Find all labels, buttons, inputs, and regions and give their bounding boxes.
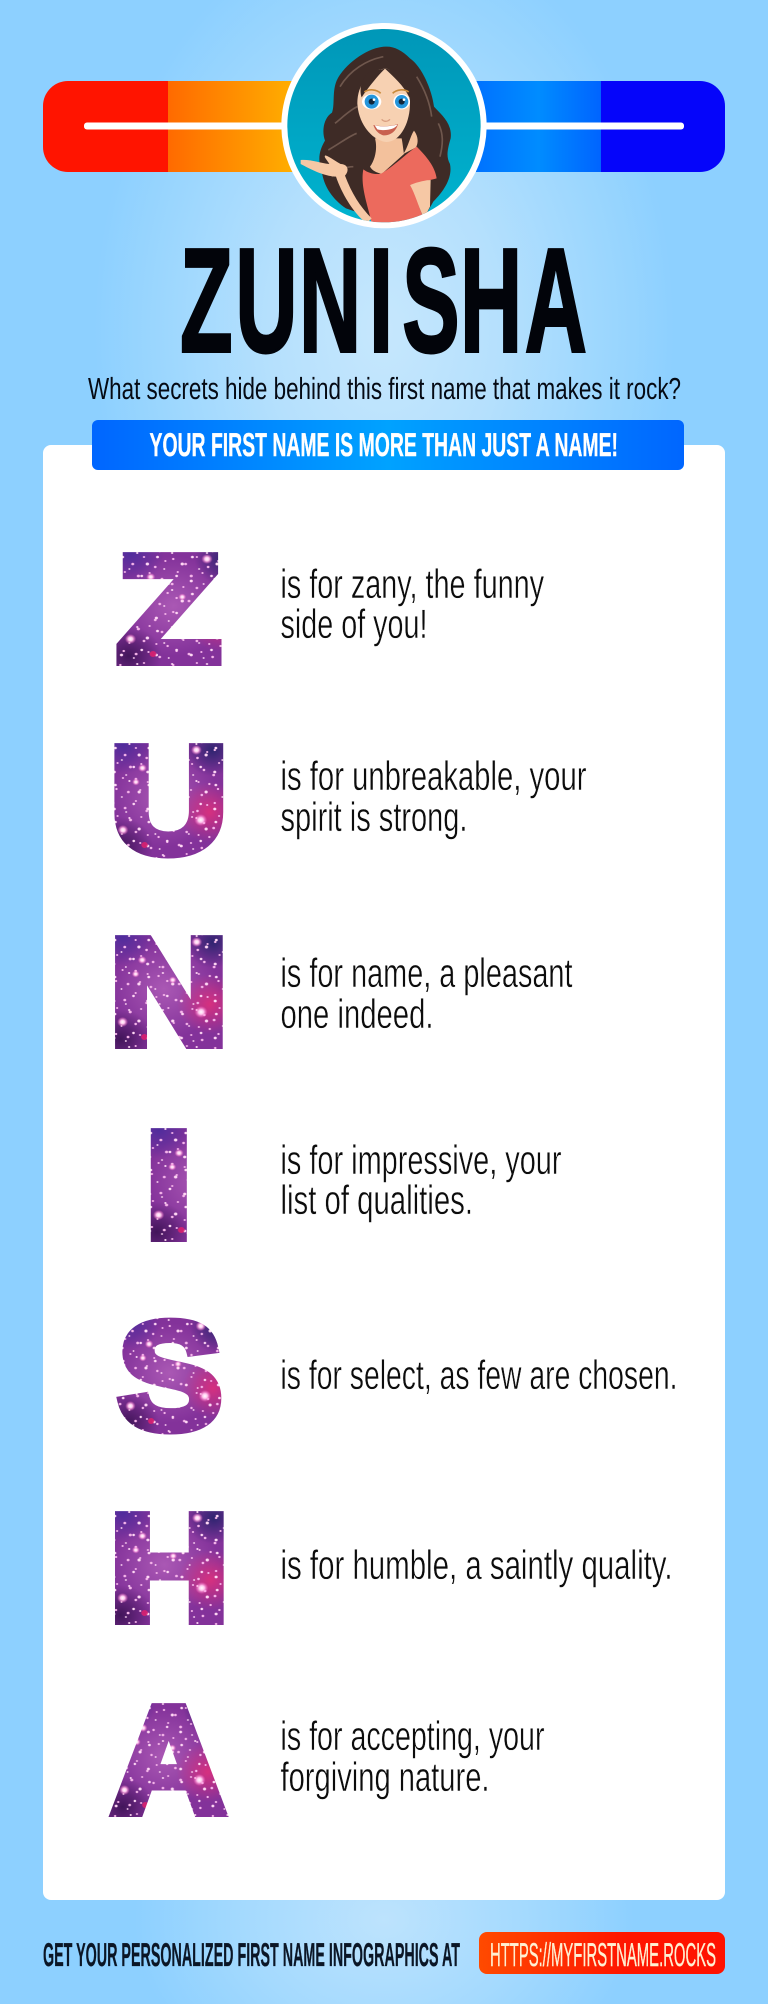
row: letter I: is for impressive, your [280,1137,562,1183]
row: letter I [145,1100,562,1269]
row: letter Z: Z [117,524,221,693]
row: letter N: N [110,907,228,1076]
row: letter U: U [110,715,228,884]
row: letter S: S [118,1291,222,1460]
row: letter Z: is for zany, the funny [280,561,544,607]
row: letter A: A [112,1675,225,1844]
header color bar [43,81,725,172]
row: letter N: is for name, a pleasant [280,950,573,996]
row: letter S [118,1291,678,1460]
row: letter A [112,1675,544,1844]
panel: white letter panel [43,445,725,1900]
title: ZUNISHA [180,218,587,384]
row: letter A: forgiving nature. [280,1754,490,1800]
row: letter U [110,715,586,884]
row: letter H [109,1483,672,1652]
row: letter A: is for accepting, your [280,1713,544,1759]
row: letter I: I [145,1100,193,1269]
row: letter N: one indeed. [280,991,434,1037]
row: letter U: spirit is strong. [280,794,468,840]
banner [92,420,684,470]
row: letter H: H [109,1483,229,1652]
row: letter Z [117,524,544,693]
row: letter I: list of qualities. [280,1177,473,1223]
row: letter N [110,907,573,1076]
row: letter U: is for unbreakable, your [280,753,586,799]
icon: avatar of woman in circle [281,23,487,228]
row: letter Z: side of you! [280,601,428,647]
